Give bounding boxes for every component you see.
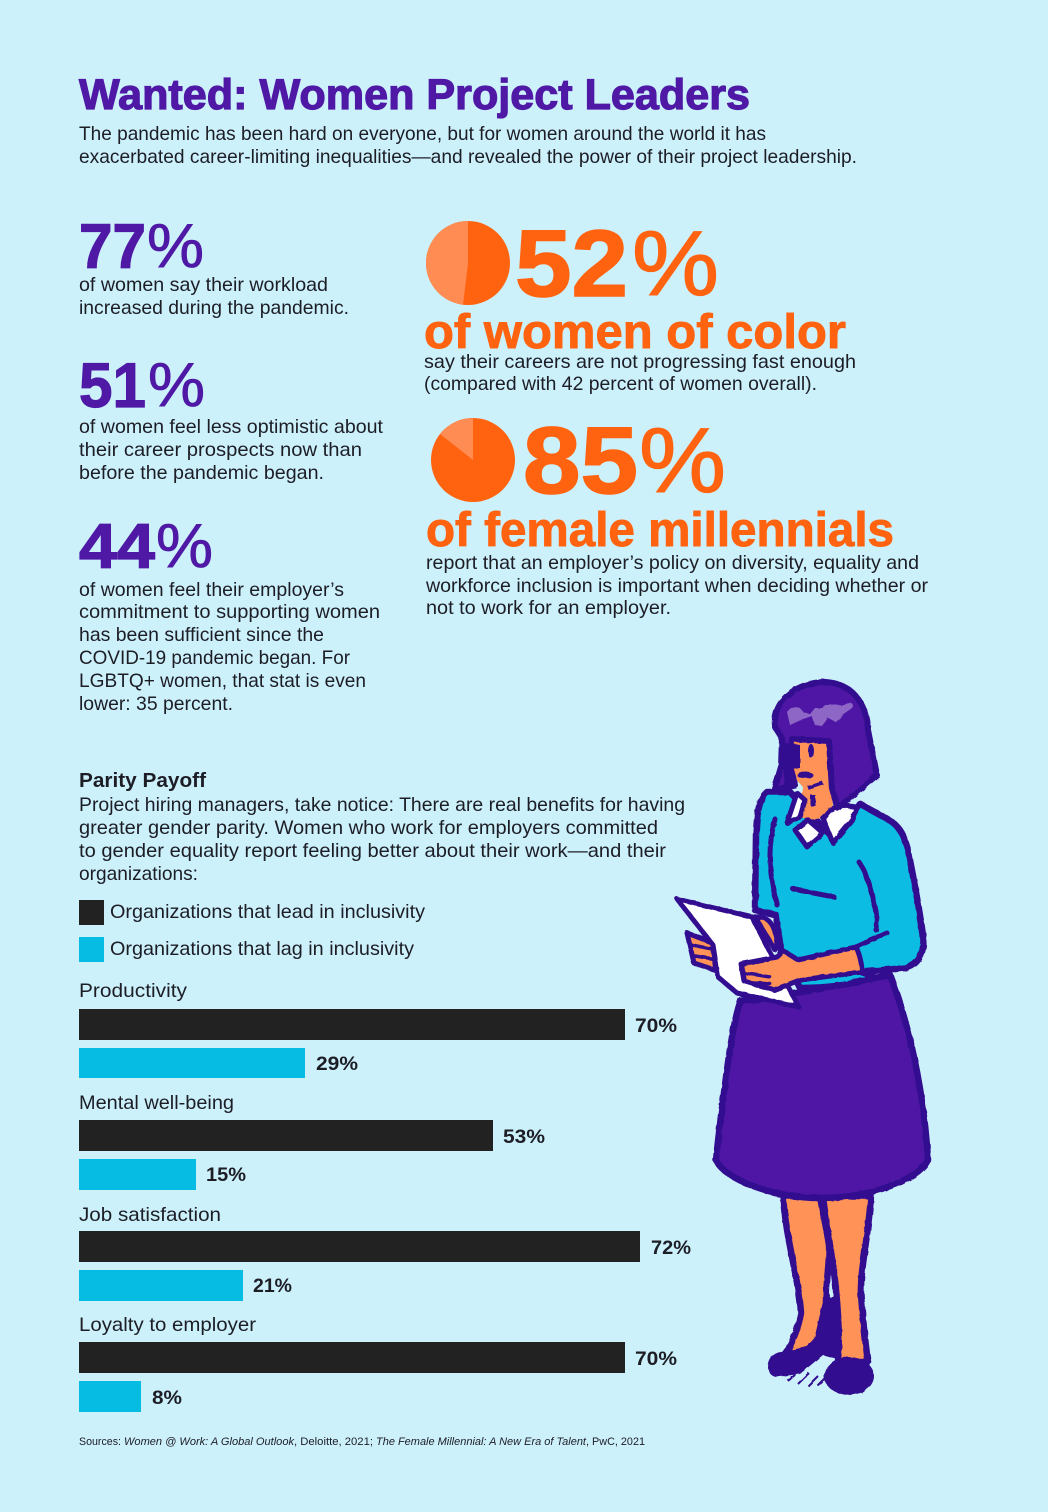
sources [79, 1436, 645, 1448]
bar group: mental well-being: 15% [206, 1164, 246, 1186]
bar group: job satisfaction [79, 1204, 691, 1301]
section heading and text: Parity Payoff: Parity Payoff [79, 770, 206, 792]
sources: , PwC, 2021 [586, 1436, 645, 1448]
stat: 52 percent of women of color: (compared with 42 percent of women overall). [424, 373, 817, 395]
section heading and text: Parity Payoff: Project hiring managers, take notice: There are real benefits for having [79, 794, 685, 816]
stat: 51 percent: of women feel less optimistic about [79, 416, 384, 438]
stat: 51 percent: their career prospects now than [79, 439, 362, 461]
thumb [755, 917, 777, 950]
section heading and text: Parity Payoff [79, 770, 685, 885]
stat: 44 percent: 44 [79, 512, 155, 582]
sweater [755, 792, 923, 988]
bar group: productivity: Productivity [79, 980, 187, 1002]
gap between arm and torso [874, 915, 886, 938]
section heading and text: Parity Payoff: to gender equality report feeling better about their work—and their [79, 840, 667, 862]
finger lines [692, 945, 770, 984]
facial features [783, 742, 823, 806]
sources: Women @ Work: A Global Outlook [124, 1436, 294, 1448]
section heading and text: Parity Payoff: greater gender parity. Women who work for employers committed [79, 817, 658, 839]
stat: 77 percent: 77 [79, 212, 146, 282]
stat: 44 percent: lower: 35 percent. [79, 693, 233, 715]
stat: 85 percent of female millennials: report that an employer’s policy on diversity, equality and [426, 552, 919, 574]
intro text [79, 123, 857, 168]
collar [787, 793, 857, 847]
stat: 77 percent: increased during the pandemic. [79, 297, 349, 319]
stat: 44 percent: COVID-19 pandemic began. For [79, 647, 350, 669]
stat: 44 percent: % [156, 512, 213, 581]
bar group: mental well-being [79, 1092, 545, 1190]
stat: 52 percent of women of color: % [632, 213, 719, 315]
legend: Organizations that lag in inclusivity [110, 938, 414, 960]
stat: 44 percent: has been sufficient since the [79, 624, 324, 646]
bar group: loyalty to employer [79, 1314, 677, 1412]
shoes [768, 1297, 874, 1395]
stat: 44 percent: LGBTQ+ women, that stat is even [79, 670, 366, 692]
stat: 52 percent of women of color: of women of color [424, 306, 846, 359]
icon: pie chart 85 percent [431, 418, 515, 502]
bar group: mental well-being: Mental well-being [79, 1092, 234, 1114]
stat: 85 percent of female millennials: workforce inclusion is important when deciding whether or [425, 575, 928, 597]
stat: 44 percent: of women feel their employer’s [79, 579, 344, 601]
stat: 77 percent: % [147, 212, 204, 281]
bar group: job satisfaction: Job satisfaction [79, 1204, 221, 1226]
stat: 51 percent: % [148, 351, 205, 420]
stat: 85 percent of female millennials: % [639, 410, 726, 512]
legend [79, 900, 425, 962]
stat: 85 percent of female millennials: 85 [523, 408, 638, 514]
skirt [716, 975, 928, 1198]
stat: 44 percent: commitment to supporting women [79, 601, 380, 623]
intro text: exacerbated career-limiting inequalities—and revealed the power of their project leadership. [79, 146, 857, 168]
forearm and hand [741, 947, 862, 990]
bar group: productivity: 29% [316, 1053, 358, 1075]
illustration: woman reading a document [677, 682, 928, 1395]
stat: 51 percent [79, 351, 384, 484]
bar group: productivity [79, 980, 677, 1078]
left hand behind paper [687, 933, 715, 970]
bar group: loyalty to employer: 70% [635, 1348, 677, 1370]
stat: 85 percent of female millennials: not to work for an employer. [426, 597, 671, 619]
intro text: The pandemic has been hard on everyone, but for women around the world it has [79, 123, 766, 145]
stat: 51 percent: 51 [79, 351, 146, 421]
legs [783, 1196, 871, 1362]
bar group: loyalty to employer: Loyalty to employer [79, 1314, 257, 1336]
stat: 85 percent of female millennials [425, 408, 928, 619]
hair [774, 682, 877, 808]
title: Wanted: Women Project Leaders [79, 71, 750, 119]
icon: pie chart 52 percent [426, 221, 510, 305]
sweater fold lines [770, 819, 877, 930]
stat: 52 percent of women of color [424, 211, 856, 395]
legend: Organizations that lead in inclusivity [110, 901, 425, 923]
sources: The Female Millennial: A New Era of Talent [376, 1436, 587, 1448]
sleeve edge [856, 933, 887, 947]
document [677, 899, 799, 1007]
bar group: productivity: 70% [635, 1015, 677, 1037]
stat: 52 percent of women of color: say their careers are not progressing fast enough [424, 351, 856, 373]
stat: 52 percent of women of color: 52 [515, 211, 628, 317]
hair highlight [787, 703, 853, 726]
stat: 77 percent: of women say their workload [79, 274, 328, 296]
sources: Sources: [79, 1436, 121, 1448]
bar group: loyalty to employer: 8% [152, 1387, 182, 1409]
bar chart: parity payoff [79, 980, 691, 1412]
section heading and text: Parity Payoff: organizations: [79, 863, 198, 885]
neck and face [790, 738, 833, 820]
stat: 85 percent of female millennials: of female millennials [426, 504, 894, 557]
stat: 51 percent: before the pandemic began. [79, 462, 324, 484]
bar group: job satisfaction: 21% [253, 1275, 292, 1297]
bar group: mental well-being: 53% [503, 1126, 545, 1148]
sources: , Deloitte, 2021; [294, 1436, 373, 1448]
stat: 44 percent [79, 512, 380, 715]
bar group: job satisfaction: 72% [651, 1237, 691, 1259]
stat: 77 percent [79, 212, 349, 319]
